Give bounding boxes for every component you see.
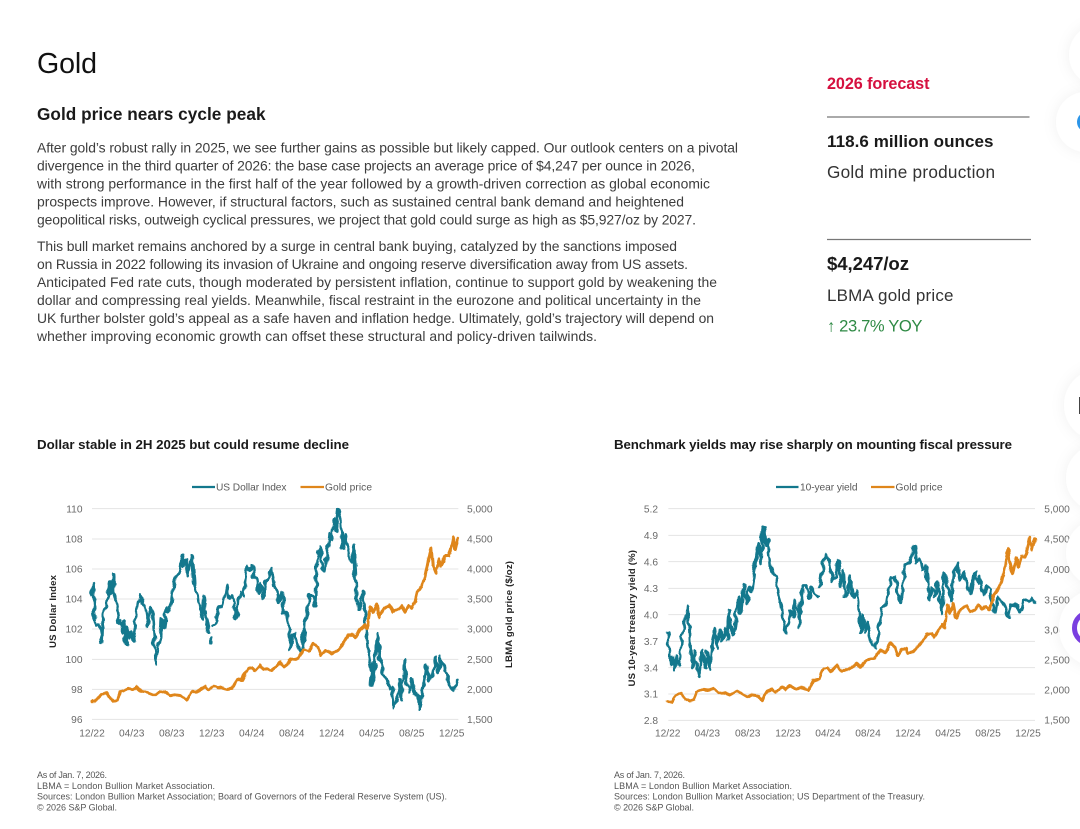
date axis labels bbox=[655, 728, 1041, 740]
title: Gold bbox=[37, 48, 97, 80]
left axis labels: 2.8 bbox=[644, 716, 658, 727]
date axis labels: 12/25 bbox=[439, 728, 465, 740]
date axis labels: 04/24 bbox=[815, 728, 841, 740]
stat: LBMA gold price: ↑ 23.7% YOY bbox=[827, 316, 922, 336]
text block: second paragraph: Anticipated Fed rate cuts, though moderated by persistent inflation, continue to support gold by weakening the bbox=[37, 274, 717, 290]
legend bbox=[192, 483, 372, 494]
left axis labels: 108 bbox=[66, 534, 83, 546]
right axis labels: 3,000 bbox=[467, 624, 493, 636]
left axis labels: 106 bbox=[66, 564, 83, 576]
legend bbox=[776, 483, 943, 494]
right axis labels: 4,000 bbox=[467, 564, 493, 576]
date axis labels: 08/24 bbox=[855, 728, 881, 740]
date axis labels bbox=[79, 728, 465, 740]
right axis labels: 5,000 bbox=[467, 504, 493, 515]
right axis labels: 2,000 bbox=[467, 685, 493, 696]
footnotes: © 2026 S&P Global. bbox=[37, 802, 117, 812]
date axis labels: 12/24 bbox=[319, 728, 345, 740]
axis title: US 10-year treasury yield: US 10-year treasury yield (%) bbox=[627, 550, 638, 686]
line chart: dollar index and gold bbox=[92, 509, 458, 719]
panel: yields chart bbox=[614, 437, 1070, 812]
footnotes: As of Jan. 7, 2026. bbox=[614, 770, 685, 780]
stat: LBMA gold price bbox=[827, 253, 954, 336]
chart title: Dollar stable in 2H 2025 but could resume decline bbox=[37, 437, 349, 452]
legend: Gold price bbox=[325, 483, 372, 494]
right axis labels bbox=[1044, 504, 1070, 727]
footnotes: LBMA = London Bullion Market Association. bbox=[37, 781, 215, 791]
footnotes bbox=[614, 770, 925, 812]
date axis labels: 04/23 bbox=[119, 728, 145, 740]
footnotes bbox=[37, 770, 447, 812]
icon: dark bar bbox=[1079, 397, 1080, 414]
left axis labels: 5.2 bbox=[644, 504, 658, 515]
left axis labels: 3.1 bbox=[644, 690, 658, 701]
footnotes: LBMA = London Bullion Market Association. bbox=[614, 781, 792, 791]
date axis labels: 04/23 bbox=[695, 728, 720, 740]
legend: 10-year yield bbox=[800, 483, 858, 494]
footnotes: © 2026 S&P Global. bbox=[614, 802, 694, 812]
left axis labels: 104 bbox=[66, 594, 83, 606]
date axis labels: 08/23 bbox=[735, 728, 761, 740]
text block: second paragraph: UK further bolster gold’s appeal as a safe haven and inflation hedge. Ultimately, gold’s trajectory will depend on bbox=[37, 310, 714, 326]
right axis labels: 4,500 bbox=[1044, 535, 1070, 546]
text block: second paragraph: on Russia in 2022 following its invasion of Ukraine and ongoing reserve diversification away from US assets. bbox=[37, 256, 688, 272]
axis title: LBMA gold price: LBMA gold price ($/oz) bbox=[504, 561, 515, 668]
left axis labels: 4.9 bbox=[644, 531, 658, 542]
text block: first paragraph: with strong performance in the first half of the year followed by a growth-driven correction as global economic bbox=[36, 176, 710, 192]
line chart: 10-year yield and gold bbox=[668, 509, 1035, 720]
text block: first paragraph: divergence in the third quarter of 2026: the base case projects an average price of $4,247 per ounce in 2026, bbox=[37, 158, 695, 174]
date axis labels: 12/22 bbox=[655, 728, 681, 740]
right axis labels: 4,500 bbox=[467, 534, 493, 546]
date axis labels: 08/23 bbox=[159, 728, 185, 740]
text block: second paragraph: This bull market remains anchored by a surge in central bank buying, catalyzed by the sanctions imposed bbox=[37, 238, 677, 254]
text block: first paragraph: After gold’s robust rally in 2025, we see further gains as possible but likely capped. Our outlook centers on a pivotal bbox=[37, 140, 738, 156]
left axis labels bbox=[66, 504, 83, 726]
left axis labels: 4.6 bbox=[644, 557, 658, 568]
stat: gold mine production bbox=[827, 132, 995, 182]
date axis labels: 12/25 bbox=[1015, 728, 1041, 740]
panel: dollar chart bbox=[37, 437, 515, 812]
panel: 2026 forecast sidebar bbox=[827, 75, 1031, 336]
right axis labels: 3,500 bbox=[1044, 596, 1070, 607]
date axis labels: 08/25 bbox=[399, 728, 425, 740]
heading: gold price nears cycle peak: Gold price nears cycle peak bbox=[37, 104, 266, 124]
forecast heading: 2026 forecast bbox=[827, 75, 930, 93]
left axis labels: 98 bbox=[71, 685, 83, 696]
right axis labels: 1,500 bbox=[1044, 716, 1070, 727]
legend: US Dollar Index bbox=[216, 483, 286, 494]
footnotes: Sources: London Bullion Market Association; Board of Governors of the Federal Reserve System (US). bbox=[37, 792, 447, 802]
right axis labels: 3,500 bbox=[467, 594, 493, 606]
icon: purple ring bbox=[1074, 612, 1080, 644]
stat: LBMA gold price: LBMA gold price bbox=[827, 286, 954, 305]
icon: blue dot bbox=[1077, 112, 1080, 132]
date axis labels: 04/24 bbox=[239, 728, 265, 740]
axis title: US Dollar Index: US Dollar Index bbox=[48, 574, 59, 648]
right axis labels bbox=[467, 504, 493, 726]
date axis labels: 12/23 bbox=[775, 728, 801, 740]
right axis labels: 3,000 bbox=[1044, 626, 1070, 637]
left axis labels: 4.0 bbox=[644, 610, 658, 621]
stat: LBMA gold price: $4,247/oz bbox=[827, 253, 909, 274]
right axis labels: 5,000 bbox=[1044, 504, 1070, 515]
date axis labels: 12/22 bbox=[79, 728, 105, 740]
text block: first paragraph: prospects improve. However, if structural factors, such as sustained central bank demand and heightened bbox=[37, 194, 684, 210]
left axis labels bbox=[644, 504, 658, 727]
stat: gold mine production: Gold mine production bbox=[827, 162, 995, 182]
right axis labels: 2,500 bbox=[467, 655, 493, 666]
stat: gold mine production: 118.6 million ounces bbox=[827, 132, 994, 151]
left axis labels: 3.7 bbox=[644, 637, 658, 648]
text block: second paragraph: whether improving economic growth can offset these structural and policy-driven tailwinds. bbox=[36, 328, 597, 344]
left axis labels: 4.3 bbox=[644, 584, 658, 595]
text block: second paragraph: dollar and compressing real yields. Meanwhile, fiscal restraint in the eurozone and political uncertainty in the bbox=[37, 292, 701, 308]
text block: second paragraph bbox=[36, 238, 717, 344]
date axis labels: 12/23 bbox=[199, 728, 225, 740]
date axis labels: 12/24 bbox=[895, 728, 921, 740]
date axis labels: 08/24 bbox=[279, 728, 305, 740]
left axis labels: 96 bbox=[71, 715, 83, 726]
left axis labels: 110 bbox=[66, 504, 83, 515]
right axis labels: 2,000 bbox=[1044, 686, 1070, 697]
chart title: Benchmark yields may rise sharply on mounting fiscal pressure bbox=[614, 437, 1012, 452]
date axis labels: 04/25 bbox=[359, 728, 385, 740]
footnotes: Sources: London Bullion Market Association; US Department of the Treasury. bbox=[614, 792, 925, 802]
left axis labels: 100 bbox=[66, 655, 83, 666]
left axis labels: 102 bbox=[66, 624, 83, 636]
right axis labels: 4,000 bbox=[1044, 565, 1070, 576]
footnotes: As of Jan. 7, 2026. bbox=[37, 770, 107, 780]
right axis labels: 2,500 bbox=[1044, 656, 1070, 667]
date axis labels: 08/25 bbox=[975, 728, 1001, 740]
text block: first paragraph: geopolitical risks, outweigh cyclical pressures, we project that gold could surge as high as $5,927/oz by 2027. bbox=[37, 212, 696, 228]
legend: Gold price bbox=[896, 483, 943, 494]
right axis labels: 1,500 bbox=[467, 715, 493, 726]
date axis labels: 04/25 bbox=[935, 728, 961, 740]
left axis labels: 3.4 bbox=[644, 663, 658, 674]
text block: first paragraph bbox=[36, 140, 738, 228]
floating circular widgets at right edge bbox=[1056, 24, 1080, 667]
